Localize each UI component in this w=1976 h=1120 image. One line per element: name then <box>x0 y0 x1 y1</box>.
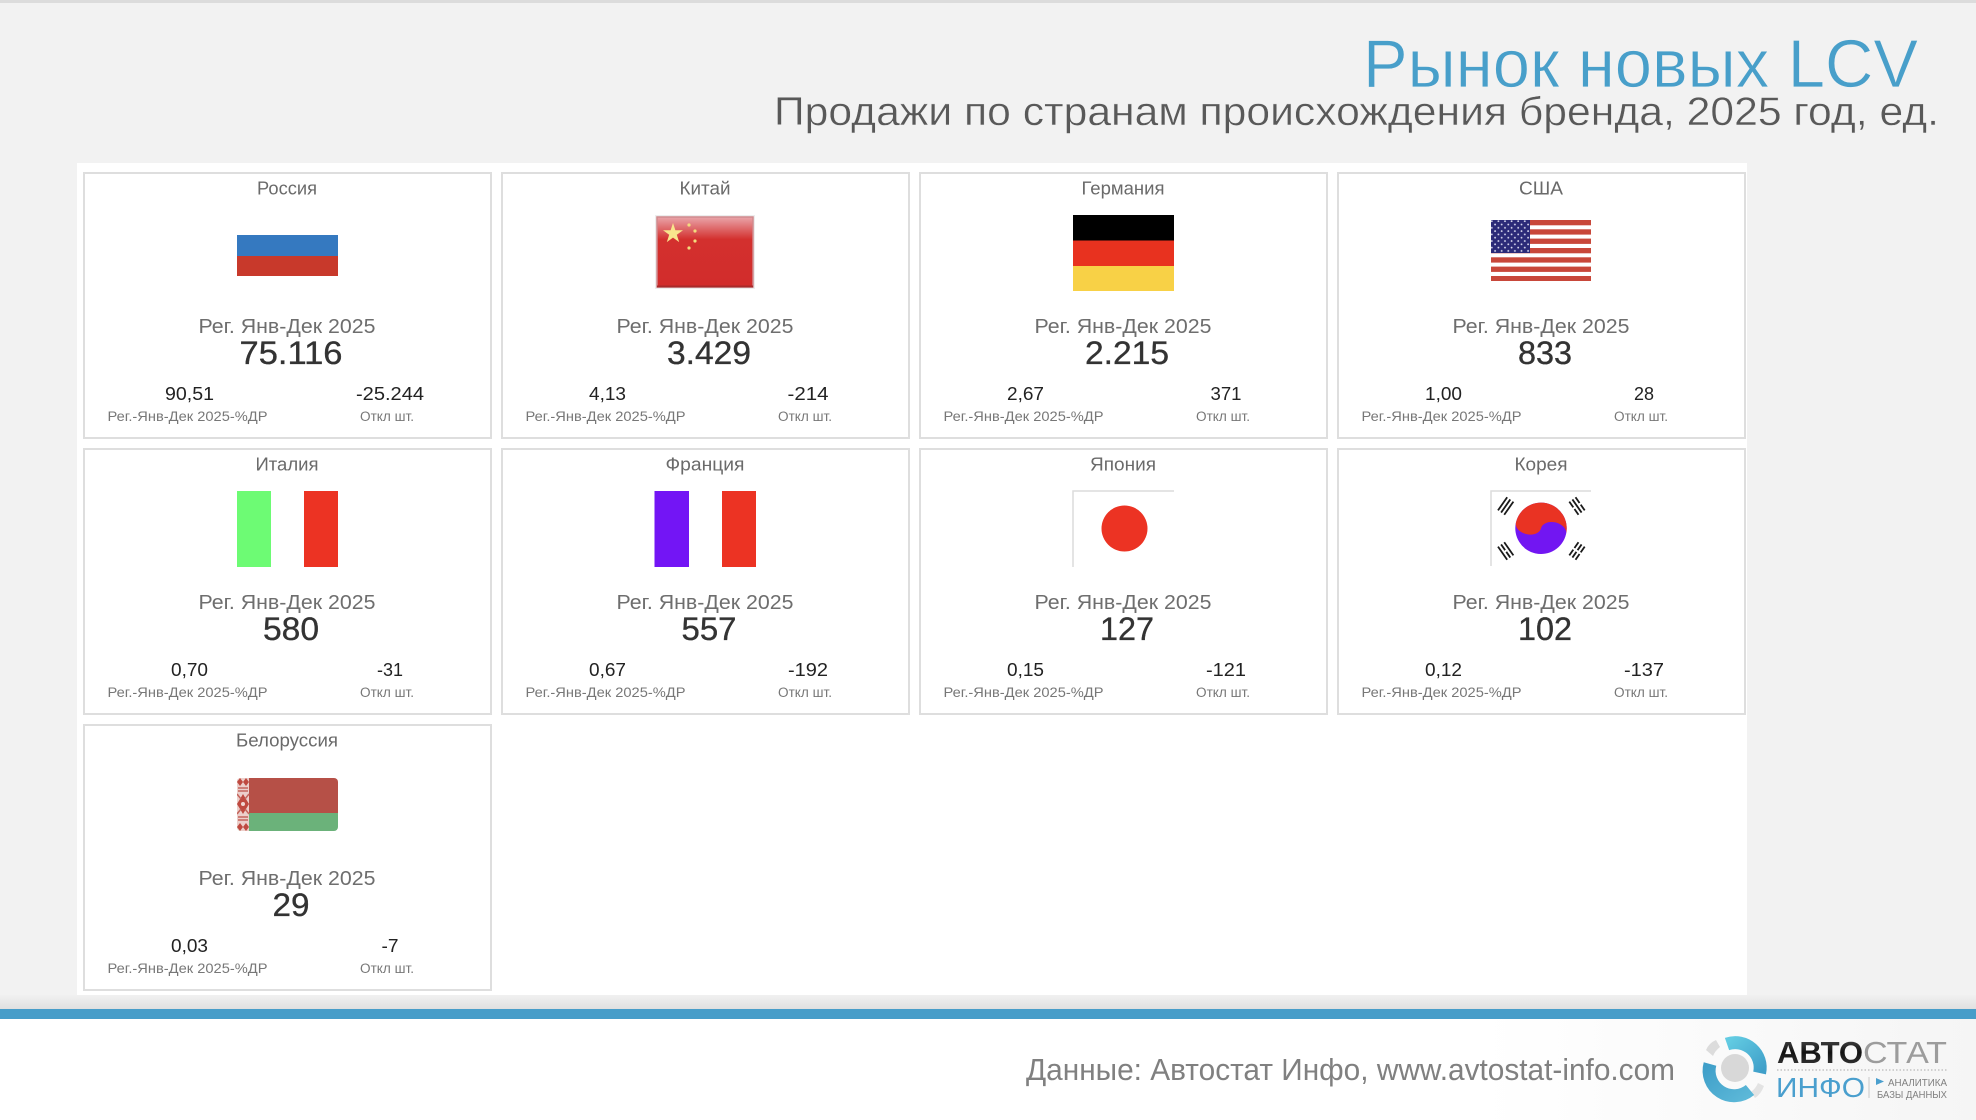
deviation value: -214 <box>788 383 828 404</box>
period label: Рег. Янв-Дек 2025 <box>198 868 376 890</box>
logo wordmark АВТО: АВТО <box>1777 1035 1863 1070</box>
panel: country cards <box>77 163 1747 995</box>
deviation value: -192 <box>788 659 828 680</box>
deviation value: -25.244 <box>356 383 424 404</box>
share value: 0,03 <box>171 935 208 956</box>
share value: 2,67 <box>1007 383 1044 404</box>
subtitle: Продажи по странам происхождения бренда, 2025 год, ед. <box>774 90 1939 134</box>
sales value: 127 <box>1100 611 1154 647</box>
flag: Belarus <box>237 778 338 831</box>
country name: Италия <box>256 454 318 474</box>
flag: Japan <box>1073 491 1174 567</box>
card: Китай <box>502 173 909 438</box>
deviation value: 28 <box>1634 383 1654 404</box>
period label: Рег. Янв-Дек 2025 <box>1034 592 1212 614</box>
card: Россия <box>84 173 491 438</box>
deviation label: Откл шт. <box>778 685 832 700</box>
share value: 0,15 <box>1007 659 1044 680</box>
share label: Рег.-Янв-Дек 2025-%ДР <box>108 409 268 424</box>
share label: Рег.-Янв-Дек 2025-%ДР <box>108 961 268 976</box>
sales value: 75.116 <box>240 335 342 371</box>
country name: Франция <box>666 454 744 474</box>
title: Рынок новых LCV <box>1363 26 1919 102</box>
logo tagline 1: АНАЛИТИКА <box>1888 1077 1947 1089</box>
card: Германия <box>920 173 1327 438</box>
deviation value: -31 <box>377 659 403 680</box>
sales value: 580 <box>263 611 319 647</box>
sales value: 833 <box>1518 335 1572 371</box>
period label: Рег. Янв-Дек 2025 <box>198 316 376 338</box>
flag: France <box>654 491 756 567</box>
sales value: 557 <box>682 611 736 647</box>
share label: Рег.-Янв-Дек 2025-%ДР <box>526 685 686 700</box>
share value: 1,00 <box>1425 383 1462 404</box>
country name: США <box>1519 178 1563 198</box>
country name: Россия <box>257 178 317 198</box>
footer band <box>0 1009 1976 1019</box>
deviation value: -7 <box>382 935 398 956</box>
footer background <box>0 1019 1976 1120</box>
sales value: 3.429 <box>667 335 751 371</box>
card: Италия <box>84 449 491 714</box>
deviation label: Откл шт. <box>778 409 832 424</box>
share label: Рег.-Янв-Дек 2025-%ДР <box>1362 685 1522 700</box>
country name: Япония <box>1090 454 1156 474</box>
sales value: 102 <box>1518 611 1572 647</box>
flag: Germany <box>1073 215 1174 291</box>
deviation label: Откл шт. <box>1614 685 1668 700</box>
logo tagline 2: БАЗЫ ДАННЫХ <box>1877 1089 1947 1101</box>
period label: Рег. Янв-Дек 2025 <box>616 316 794 338</box>
deviation value: 371 <box>1210 383 1242 404</box>
share value: 0,12 <box>1425 659 1462 680</box>
deviation label: Откл шт. <box>360 685 414 700</box>
logo swirl icon <box>1706 1040 1764 1098</box>
period label: Рег. Янв-Дек 2025 <box>1034 316 1212 338</box>
flag: China <box>655 215 755 289</box>
flag: Italy <box>237 491 338 567</box>
period label: Рег. Янв-Дек 2025 <box>616 592 794 614</box>
share label: Рег.-Янв-Дек 2025-%ДР <box>108 685 268 700</box>
sales value: 2.215 <box>1085 335 1169 371</box>
share label: Рег.-Янв-Дек 2025-%ДР <box>944 685 1104 700</box>
flag: USA <box>1491 220 1591 281</box>
period label: Рег. Янв-Дек 2025 <box>1452 592 1630 614</box>
card: Белоруссия <box>84 725 491 990</box>
card: Франция <box>502 449 909 714</box>
share value: 0,67 <box>589 659 626 680</box>
deviation label: Откл шт. <box>360 961 414 976</box>
share label: Рег.-Янв-Дек 2025-%ДР <box>526 409 686 424</box>
card: США <box>1338 173 1745 438</box>
country name: Китай <box>680 178 730 198</box>
period label: Рег. Янв-Дек 2025 <box>1452 316 1630 338</box>
logo wordmark ИНФО: ИНФО <box>1776 1072 1865 1103</box>
deviation value: -137 <box>1624 659 1664 680</box>
deviation value: -121 <box>1206 659 1246 680</box>
logo wordmark СТАТ: СТАТ <box>1863 1035 1947 1070</box>
footer shadow <box>0 995 1976 1009</box>
country name: Белоруссия <box>236 730 338 750</box>
sales value: 29 <box>272 887 310 923</box>
source note: Данные: Автостат Инфо, www.avtostat-info.com <box>1026 1052 1675 1087</box>
card: Япония <box>920 449 1327 714</box>
flag: South Korea <box>1491 491 1591 566</box>
deviation label: Откл шт. <box>1196 409 1250 424</box>
share label: Рег.-Янв-Дек 2025-%ДР <box>1362 409 1522 424</box>
share value: 0,70 <box>171 659 208 680</box>
period label: Рег. Янв-Дек 2025 <box>198 592 376 614</box>
country name: Германия <box>1082 178 1164 198</box>
card: Корея <box>1338 449 1745 714</box>
share label: Рег.-Янв-Дек 2025-%ДР <box>944 409 1104 424</box>
logo arrow <box>1876 1078 1884 1085</box>
country name: Корея <box>1514 454 1568 474</box>
logo: Avtostat Info <box>1706 1035 1947 1103</box>
deviation label: Откл шт. <box>360 409 414 424</box>
deviation label: Откл шт. <box>1196 685 1250 700</box>
flag: Russia <box>237 235 338 276</box>
deviation label: Откл шт. <box>1614 409 1668 424</box>
share value: 90,51 <box>165 383 214 404</box>
share value: 4,13 <box>589 383 626 404</box>
